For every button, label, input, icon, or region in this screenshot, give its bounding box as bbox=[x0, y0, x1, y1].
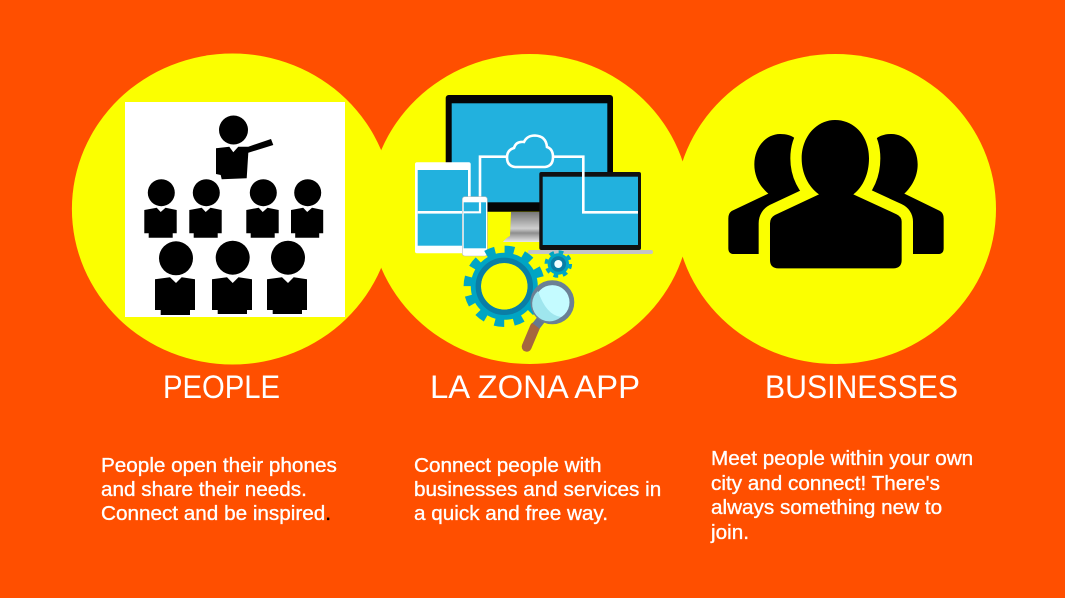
icon: devices, cloud, gears and magnifier bbox=[415, 95, 653, 347]
magnifier bbox=[527, 283, 572, 347]
text: businesses description: join. bbox=[710, 521, 749, 544]
front person outline bbox=[770, 120, 902, 268]
laptop bbox=[528, 172, 653, 254]
phone bbox=[462, 197, 487, 256]
front person bbox=[770, 120, 902, 268]
text: businesses description: always something new to bbox=[711, 496, 942, 519]
circle: businesses bbox=[675, 54, 996, 364]
cloud bbox=[507, 136, 553, 167]
icon: presenter and audience bbox=[125, 102, 345, 317]
circle: la zona app bbox=[369, 54, 690, 364]
text: businesses description: city and connect! There's bbox=[711, 472, 940, 495]
network lines bbox=[418, 157, 638, 212]
text: app description: a quick and free way. bbox=[414, 502, 608, 525]
tablet bbox=[415, 162, 471, 253]
heading: la zona app: LA ZONA APP bbox=[430, 369, 640, 405]
icon: business group bbox=[728, 120, 944, 268]
text: app description: businesses and services in bbox=[414, 478, 661, 501]
text: people description: People open their phones bbox=[101, 454, 337, 477]
presenter bbox=[216, 116, 273, 179]
text: people description: and share their needs. bbox=[101, 478, 307, 501]
monitor bbox=[446, 95, 613, 242]
text: app description bbox=[414, 454, 661, 525]
audience middle row bbox=[144, 179, 323, 238]
heading: businesses: BUSINESSES bbox=[765, 369, 958, 405]
circle: people bbox=[72, 54, 393, 364]
big gear bbox=[468, 249, 541, 323]
heading: people: PEOPLE bbox=[163, 369, 280, 405]
audience front row bbox=[155, 241, 307, 315]
small gear bbox=[546, 252, 570, 276]
text: app description: Connect people with bbox=[414, 454, 601, 477]
text: businesses description: Meet people within your own bbox=[711, 447, 973, 470]
text: businesses description bbox=[710, 447, 973, 544]
text: people description bbox=[101, 454, 337, 525]
back right person bbox=[855, 134, 944, 254]
text: people description: Connect and be inspired. bbox=[101, 502, 331, 525]
back left person bbox=[728, 134, 815, 254]
